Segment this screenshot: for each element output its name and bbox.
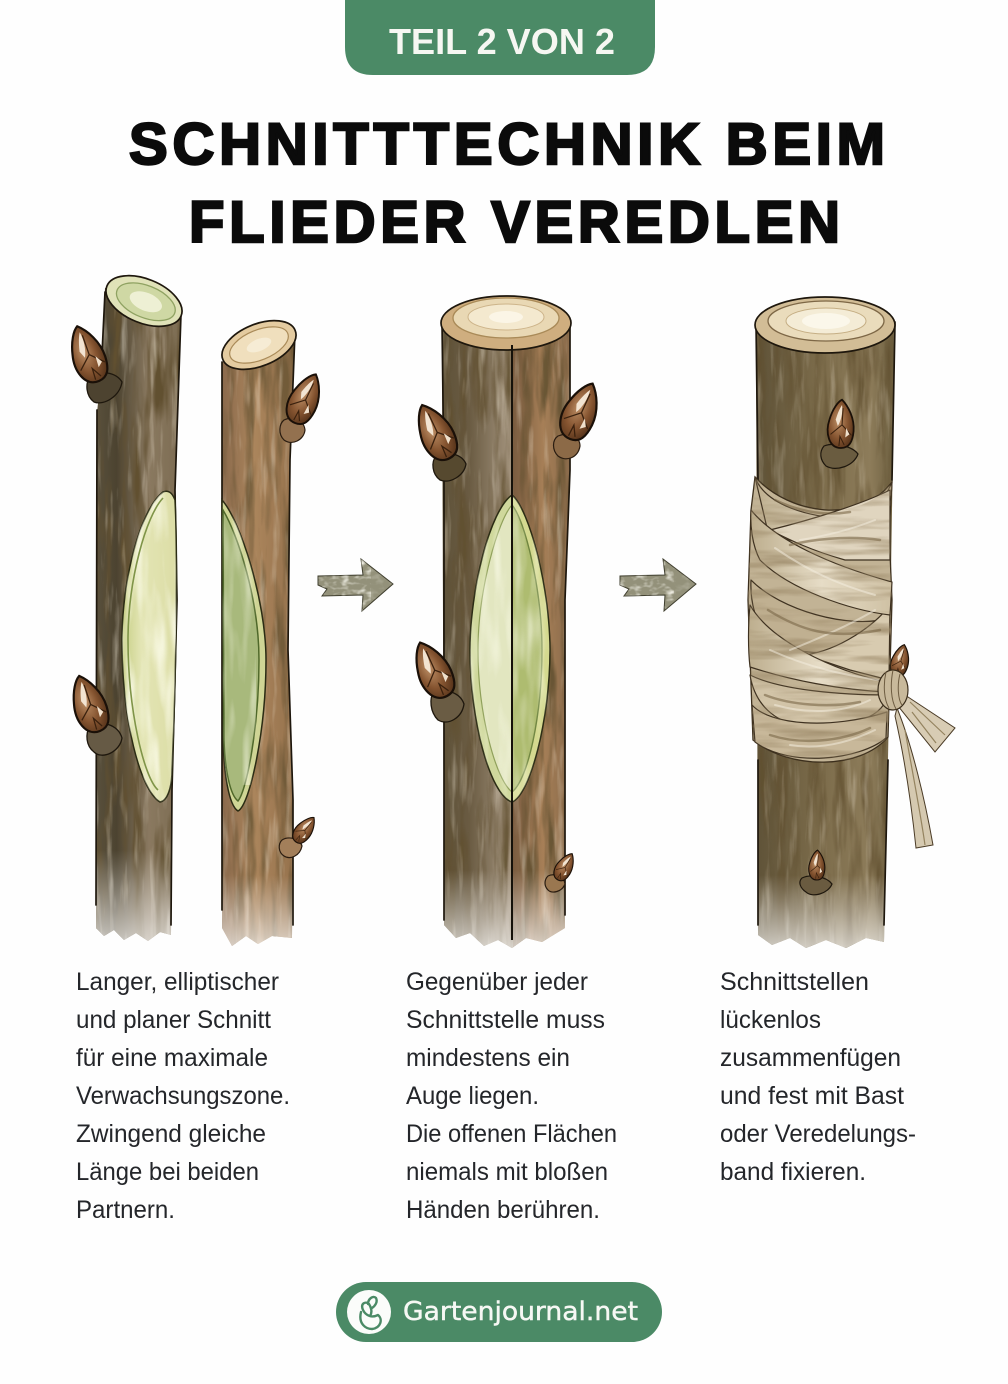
- text block: step two: [406, 968, 617, 1224]
- text block: step two: mindestens ein: [406, 1044, 570, 1072]
- text block: step three: [720, 968, 916, 1186]
- right stem bark: [222, 344, 294, 946]
- text block: step one: Länge bei beiden: [76, 1158, 259, 1186]
- illustration: stem bound with raffia: [745, 297, 955, 950]
- joined stem bark: [440, 310, 573, 950]
- left stem buds: [61, 321, 122, 755]
- text block: step one: Langer, elliptischer: [76, 968, 279, 996]
- right stem top cut: [215, 311, 303, 379]
- joined stem elliptical cuts: [470, 495, 550, 802]
- right stem outline: [222, 332, 295, 925]
- left stem outline: [96, 292, 181, 925]
- text block: step one: für eine maximale: [76, 1044, 268, 1072]
- brand name: Gartenjournal.net: [403, 1297, 638, 1327]
- text block: step two: Gegenüber jeder: [406, 968, 588, 996]
- right stem buds: [279, 368, 328, 858]
- text block: step three: oder Veredelungs-: [720, 1120, 916, 1148]
- text block: step one: Zwingend gleiche: [76, 1120, 266, 1148]
- illustration: two separate stems with elliptical cuts: [61, 266, 328, 950]
- text block: step two: niemals mit bloßen: [406, 1158, 608, 1186]
- bound stem outline: [756, 322, 895, 925]
- arrow: step two to step three: [618, 557, 698, 613]
- text block: step three: lückenlos: [720, 1006, 821, 1034]
- joined stem top cut: [441, 296, 571, 350]
- text block: step two: Die offenen Flächen: [406, 1120, 617, 1148]
- text block: step one: Partnern.: [76, 1196, 175, 1224]
- title: SCHNITTTECHNIK BEIM: [129, 112, 885, 177]
- bound stem bark: [756, 332, 894, 948]
- icon: sprout logo: [347, 1290, 391, 1334]
- footer badge: [336, 1282, 662, 1342]
- raffia wrap: [745, 475, 895, 770]
- right stem elliptical cut: [222, 500, 266, 811]
- join line: [511, 345, 513, 940]
- arrow: step one to step two: [316, 557, 395, 613]
- title: FLIEDER VEREDLEN: [189, 190, 840, 255]
- left stem elliptical cut: [120, 490, 180, 805]
- top banner: part label: [345, 0, 655, 75]
- raffia knot: [878, 670, 908, 710]
- text block: step one: und planer Schnitt: [76, 1006, 271, 1034]
- bound stem top cut: [755, 297, 895, 353]
- joined stem buds: [404, 377, 606, 892]
- joined stem outline: [442, 322, 570, 920]
- bound stem buds: [800, 400, 912, 895]
- left stem bark: [96, 288, 180, 941]
- text block: step one: Verwachsungszone.: [76, 1082, 290, 1110]
- text block: step two: Schnittstelle muss: [406, 1006, 605, 1034]
- illustration: joined stems: [404, 296, 606, 950]
- text block: step one: [76, 968, 290, 1224]
- left stem top cut: [99, 266, 189, 336]
- text block: step three: Schnittstellen: [720, 968, 869, 996]
- top banner: part label: TEIL 2 VON 2: [389, 21, 615, 62]
- text block: step two: Auge liegen.: [406, 1082, 539, 1110]
- raffia tails: [895, 695, 955, 848]
- text block: step three: band fixieren.: [720, 1158, 866, 1186]
- text block: step three: zusammenfügen: [720, 1044, 901, 1072]
- text block: step two: Händen berühren.: [406, 1196, 600, 1224]
- text block: step three: und fest mit Bast: [720, 1082, 904, 1110]
- title: [129, 112, 885, 255]
